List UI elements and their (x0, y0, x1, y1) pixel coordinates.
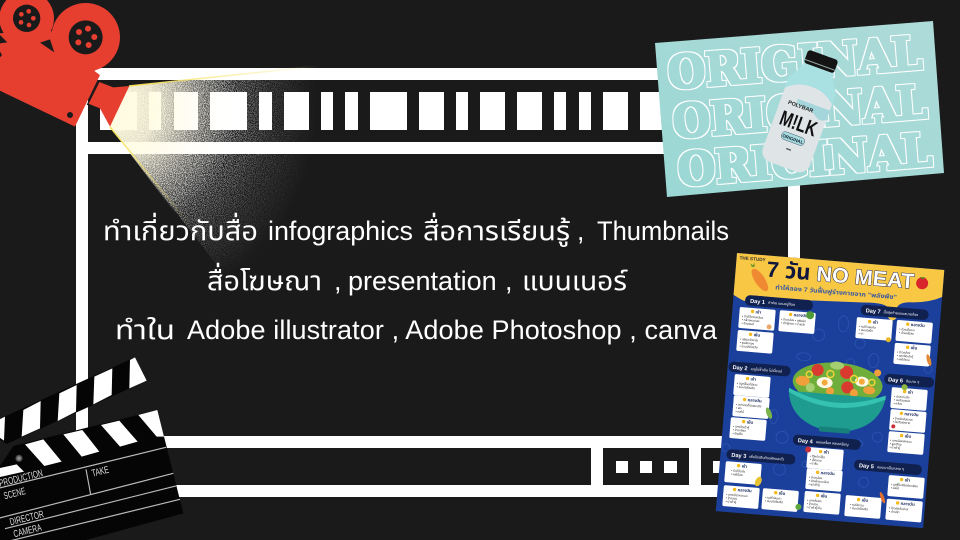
projector lens (88, 82, 129, 127)
meal card: day 4 lunch (805, 468, 843, 492)
meal card: day 3 lunch: • แกงเขียวหวานเจ (726, 492, 748, 498)
meal card: day 3 lunch: • ข้าวสวย (726, 496, 737, 501)
meal card: day 1 dinner: เย็น (753, 332, 761, 338)
meal card: day 5 breakfast: • ผลไม้ (891, 486, 899, 490)
meal card: day 7 breakfast (855, 317, 893, 341)
meal card: day 2 lunch (732, 395, 770, 419)
meal card: day 3 breakfast: • ข้าวโอ๊ตถั่ว (731, 468, 746, 474)
poster title: NO MEAT (816, 263, 915, 294)
day pills: ทำง่าย แถมอยู่ท้อง (768, 301, 795, 307)
day pills: แบบเบาเป็นกลาง ๆ (877, 464, 904, 471)
text line 3: Adobe illustrator , Adobe Photoshop , canva (187, 315, 718, 345)
text line 1 (103, 212, 729, 247)
meal card: day 2 lunch: • ผัก (736, 406, 742, 410)
film perforations: bottom (591, 448, 725, 485)
meal card: day 7 lunch (895, 320, 933, 344)
day pills: Day 3 (731, 453, 747, 460)
meal card: day 2 lunch: • สปาเกตตี้ซอสมะเขือ (736, 401, 762, 408)
milk bottle: M!LK (777, 107, 820, 141)
meal card: day 2 dinner (729, 417, 767, 441)
icon: carrot (747, 262, 773, 294)
meal card: day 4 breakfast (806, 447, 844, 471)
icon: clapperboard: CAMERA (12, 523, 43, 540)
panel: milk packaging sample (655, 21, 944, 197)
text line 2: , (334, 266, 342, 296)
meal card: day 2 breakfast: • สมูทตี้ผลไม้รวม (737, 380, 758, 387)
meal card: day 2 dinner: • แกงจืดเต้าหู้ (733, 424, 750, 430)
day pills: อิ่มนาน ๆ (906, 379, 920, 384)
meal card: day 1 dinner (736, 330, 774, 354)
text line 2: presentation (348, 266, 497, 296)
text line 1: สื่อการเรียนรู้ (423, 212, 570, 247)
meal card: day 6 breakfast: เช้า (907, 389, 914, 395)
meal card: day 7 breakfast: เช้า (872, 319, 879, 325)
meal card: day 3 dinner (761, 488, 799, 512)
day pills (721, 294, 940, 476)
meal card: day 3 lunch: • น้ำเต้าหู้ (725, 498, 737, 504)
poster title (737, 254, 915, 303)
panel: 7 day no meat poster (716, 253, 944, 528)
meal card: day 1 breakfast: • กล้วยหอมนม (742, 318, 760, 323)
meal card: day 2 dinner: เย็น (746, 419, 754, 425)
meal card: day 2 breakfast: • ขนมปังโฮลวีต (737, 385, 755, 390)
meal card: day 5 breakfast: เช้า (904, 477, 911, 483)
meal card: day 6 dinner: • ลูกเดือย (890, 442, 902, 447)
meal card: day 3 lunch: กลางวัน (737, 487, 752, 493)
meal card: day 4 breakfast: เช้า (823, 449, 830, 455)
text line 2: แบนเนอร์ (522, 266, 628, 296)
meal card: day 4 dinner: เย็น (820, 493, 828, 499)
ORIGINAL outlined text (666, 26, 934, 197)
meal card: day 7 dinner: เย็น (910, 345, 918, 351)
meal card: day 7 dinner: • ผลไม้รวม (896, 357, 910, 362)
meal card: day 5 dinner: • ขนมปังโฮลวีต (850, 506, 868, 511)
meal card: day 6 lunch: กลางวัน (904, 411, 919, 417)
milk bottle (759, 46, 847, 175)
icon: film projector (0, 0, 129, 127)
text line 1: Thumbnails (597, 216, 729, 246)
meal card: day 1 lunch: กลางวัน (793, 312, 808, 318)
meal card: day 5 lunch: กลางวัน (900, 501, 915, 507)
ORIGINAL outlined text: ORIGINAL (676, 123, 934, 197)
meal card: day 4 breakfast: • น้ำส้ม (809, 460, 818, 466)
day pills: หลบเครื่อง หลบเหรียญ (816, 439, 849, 447)
meal card: day 6 lunch: • ต้มจืดผักกาด (893, 420, 911, 425)
meal card: day 3 lunch (722, 485, 760, 509)
meal card: day 7 dinner: • ข้าวกล้อง (897, 350, 911, 355)
clapper arm (0, 357, 147, 444)
milk bottle: ORIGINAL (782, 133, 804, 145)
icon: clapperboard: SCENE (3, 486, 27, 502)
day pills: เพิ่มโปรตีนด้วยผักและถั่ว (749, 454, 785, 462)
meal card: day 6 lunch (889, 409, 927, 433)
meal card: day 6 dinner: • น้ำเต้าหู้ (889, 444, 901, 450)
icon: clapperboard (0, 357, 183, 540)
meal card: day 3 dinner: • ซุปถั่วลันเตา (765, 495, 782, 501)
icon: clapperboard: TAKE (91, 465, 110, 480)
meal card: day 7 lunch: • น้ำผลไม้สด (899, 330, 914, 336)
meal cards (722, 307, 938, 522)
meal card: day 5 lunch: • น้ำเปล่า (889, 508, 900, 514)
meal card: day 5 dinner: เย็น (861, 497, 869, 503)
meal card: day 6 dinner: • แกงเลียงผักรวม (890, 438, 912, 444)
meal card: day 7 lunch: กลางวัน (911, 322, 925, 328)
meal card: day 4 dinner: • ข้าวสวย (807, 502, 818, 506)
meal card: day 6 dinner (887, 431, 925, 455)
text line 2: สื่อโฆษณา (207, 262, 322, 296)
meal card: day 1 breakfast: เช้า (755, 309, 762, 315)
poster title: ทำให้ลอง 7 วันฟื้นฟูร่างกายจาก "พลังพืช" (775, 282, 897, 301)
meal card: day 2 breakfast: เช้า (750, 376, 757, 382)
meal card: day 4 dinner: • แกงส้มผัก (807, 498, 822, 503)
meal card: day 3 dinner: • ขนมปังโฮลวีต (765, 499, 783, 504)
salad bowl (786, 358, 888, 437)
clapper body (0, 410, 183, 540)
poster title: 7 วัน (766, 257, 812, 285)
text line 2 (207, 262, 628, 296)
meal card: day 4 lunch: • ข้าวกล้อง (809, 475, 823, 480)
text line 3: ทำใน (115, 315, 175, 345)
poster title: THE STUDY (739, 255, 766, 262)
meal card: day 5 dinner (844, 495, 882, 519)
text line 1: infographics (268, 216, 413, 246)
meal card: day 6 breakfast: • มันหวานนึ่ง (894, 393, 910, 400)
meal card: day 4 dinner (803, 491, 841, 515)
meal card: day 1 breakfast: • ข้าวโอ๊ตกับกล้วย (742, 313, 764, 320)
projector light beam (110, 64, 335, 295)
meal card: day 5 lunch (885, 499, 923, 522)
meal card: day 5 lunch: • ข้าวผัดต้มยำเจ (889, 506, 909, 511)
meal card: day 2 breakfast (733, 374, 771, 398)
day pills: มื้อสุดท้ายแบบสบายท้อง (883, 309, 919, 317)
meal card: day 6 dinner: เย็น (904, 433, 912, 439)
meal card: day 7 breakfast: • ชา (858, 331, 864, 336)
film strip frame (76, 68, 800, 497)
meal card: day 1 lunch (778, 310, 816, 334)
meal card: day 5 dinner: • ซุปผักรวม (850, 502, 864, 508)
meal card: day 4 lunch: • ซุปเต้าหู้ (808, 482, 820, 487)
meal card: day 7 lunch: • ก๋วยเตี๋ยวเจ (899, 326, 915, 332)
main description text (103, 212, 729, 345)
icon: tomato (916, 277, 929, 290)
poster yellow header (733, 253, 944, 324)
meal card: day 2 dinner: • ธัญพืช (732, 431, 743, 436)
ORIGINAL outlined text: ORIGINAL (671, 75, 929, 149)
meal card: day 3 breakfast: • ผลไม้สด (731, 472, 743, 477)
meal card: day 4 lunch: • ผัดเห็ดรวมมิตร (809, 478, 830, 484)
day pills: Day 5 (859, 463, 874, 470)
meal card: day 7 dinner (893, 343, 931, 367)
meal card: day 6 breakfast: • กล้วย (893, 401, 903, 406)
small vegetable accents (752, 308, 936, 520)
meal card: day 1 dinner: • สลัดอะโวคาโด (740, 337, 758, 343)
ORIGINAL outlined text: ORIGINAL (666, 26, 924, 100)
milk bottle: POLYBAR (787, 100, 814, 115)
meal card: day 1 dinner: • ซุปฟักทอง (740, 341, 755, 346)
meal card: day 3 breakfast: เช้า (741, 463, 748, 469)
text line 1: , (577, 216, 584, 246)
meal card: day 7 dinner: • แกงจืดเต้าหู้ (897, 353, 913, 359)
icon: clapperboard: DIRECTOR (9, 509, 45, 528)
meal card: day 2 lunch: • ผลไม้ (735, 409, 744, 414)
text line 1: ทำเกี่ยวกับสื่อ (103, 212, 258, 246)
meal card: day 1 breakfast (738, 307, 776, 331)
meal card: day 1 dinner: • ขนมปังโฮลวีต (739, 344, 758, 350)
poster doodles (720, 307, 936, 492)
meal card: day 4 breakfast: • เห็ดหอม (810, 457, 822, 463)
day pills: Day 2 (732, 365, 748, 372)
day pills: เมนูไม่ซ้ำเดิม ไม่เบื่อแน่ (750, 366, 782, 374)
meal card: day 6 breakfast (890, 387, 928, 411)
meal card: day 2 dinner: • ข้าวกล้อง (733, 428, 746, 433)
meal card: day 7 breakfast: • ซุปถั่วเลนทิล (859, 323, 876, 330)
day pills: Day 7 (865, 308, 881, 315)
film perforations: top (100, 92, 702, 130)
meal card: day 4 lunch: กลางวัน (820, 470, 835, 476)
day pills: Day 1 (750, 299, 765, 306)
meal card: day 4 breakfast: • โจ๊กข้าวโอ๊ต (810, 453, 825, 459)
meal card: day 1 lunch: • เต้าหู้ทอด • น้ำเปล่า (781, 320, 806, 327)
day pills: Day 6 (888, 377, 903, 385)
salad (791, 358, 884, 408)
day pills: Day 4 (798, 438, 814, 445)
meal card: day 5 breakfast: • มูสลี่โยเกิร์ตถั่วเหลือง (891, 481, 919, 488)
meal card: day 5 breakfast (887, 475, 925, 499)
meal card: day 1 breakfast: • อัลมอนด์ (741, 321, 754, 326)
meal card: day 6 breakfast: • นมอัลมอนด์ (894, 398, 910, 403)
meal card: day 3 dinner: เย็น (778, 490, 786, 496)
meal card: day 7 breakfast: • ขนมปังปิ้ง (859, 327, 874, 333)
meal card: day 4 dinner: • น้ำเต้าหู้เย็น (806, 504, 822, 510)
meal card: day 1 lunch: • ข้าวกล้อง • สลัดผัก (781, 317, 806, 323)
meal card: day 3 breakfast (724, 461, 762, 485)
meal card: day 6 lunch: • ข้าวผัดสับปะรด (893, 416, 913, 422)
meal card: day 2 lunch: กลางวัน (747, 397, 762, 403)
icon: clapperboard: PRODUCTION (0, 468, 44, 490)
text line 2: , (505, 266, 513, 296)
